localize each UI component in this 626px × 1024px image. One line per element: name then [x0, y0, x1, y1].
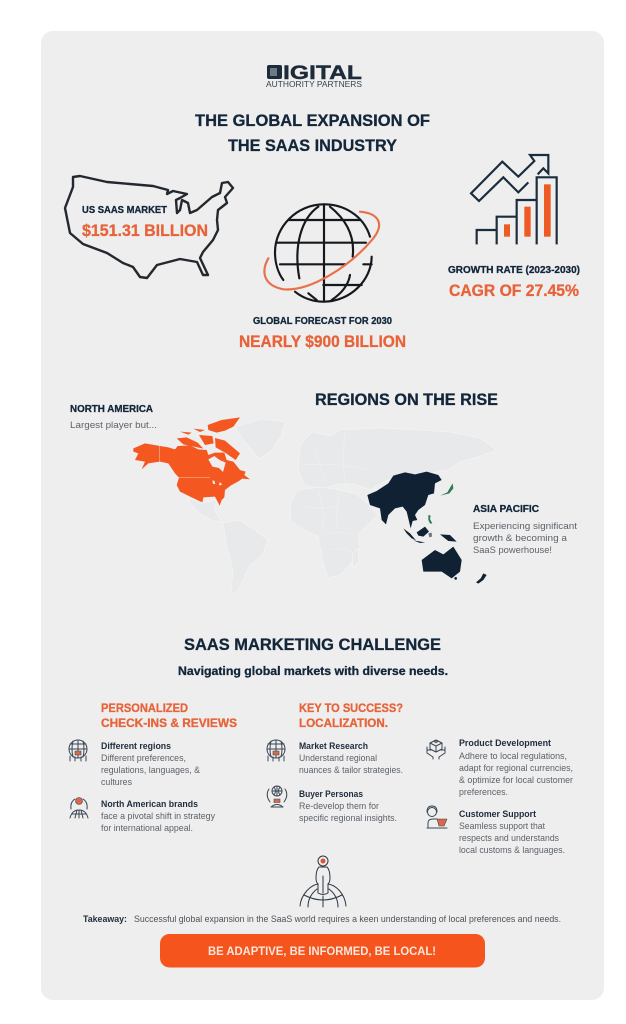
label: Asia Pacific: [473, 504, 577, 556]
heading: regions on the rise: REGIONS ON THE RISE: [315, 390, 498, 409]
column heading: KEY TO SUCCESS?: [299, 701, 403, 715]
text: North American brands: [101, 799, 215, 834]
text: buyer personas: Buyer Personas: [299, 789, 363, 800]
stat: growth rate: [448, 155, 580, 300]
text: market research: Understand regional: [299, 753, 377, 764]
icon: person on globe: [300, 856, 346, 907]
logo: [266, 62, 362, 89]
heading: SaaS marketing challenge: [178, 635, 448, 678]
text: buyer personas: specific regional insights.: [299, 813, 397, 824]
column: key to success: [267, 701, 403, 824]
text: product development: & optimize for local customer: [459, 775, 573, 786]
icon: buyer personas: [267, 786, 287, 807]
text: buyer personas: [299, 789, 397, 824]
text: customer support: [459, 809, 565, 856]
text: product development: Adhere to local regulations,: [459, 751, 567, 762]
title: [195, 111, 430, 155]
stat: global forecast: [239, 204, 406, 351]
US-Canada border line: [179, 476, 210, 478]
logo: AUTHORITY PARTNERS: [266, 80, 362, 89]
icon: globe with orbit: [264, 204, 379, 302]
text: different regions: cultures: [101, 777, 132, 788]
column heading: [299, 701, 403, 730]
text: customer support: local customs & languages.: [459, 845, 565, 856]
column heading: LOCALIZATION.: [299, 716, 388, 730]
call-to-action button: BE ADAPTIVE, BE INFORMED, BE LOCAL!: [208, 946, 436, 958]
label: growth rate: GROWTH RATE (2023-2030): [448, 265, 580, 276]
stat: US SaaS market: [65, 176, 233, 278]
text: buyer personas: Re-develop them for: [299, 801, 379, 812]
logo: IGITAL: [283, 62, 362, 84]
icon: growth bars and arrow: [471, 155, 557, 244]
column: product and support: [427, 738, 573, 856]
text: product development: [459, 738, 573, 798]
value: growth rate: CAGR OF 27.45%: [449, 282, 579, 300]
map: North America highlighted: [133, 417, 250, 506]
text: different regions: Different regions: [101, 741, 171, 752]
takeaway text: Successful global expansion in the SaaS world requires a keen understanding of local preferences and needs.: [134, 914, 561, 924]
column: personalized check-ins: [69, 701, 237, 834]
icon: product development: [427, 740, 445, 759]
text: customer support: Seamless support that: [459, 821, 545, 832]
map: rest of world: [187, 419, 497, 594]
takeaway text: Takeaway:: [83, 914, 127, 924]
map: Asia Pacific highlighted: [367, 472, 487, 584]
title: THE GLOBAL EXPANSION OF: [195, 111, 430, 130]
text: different regions: Different preferences,: [101, 753, 186, 764]
text: North American brands: face a pivotal shift in strategy: [101, 811, 215, 822]
text: customer support: Customer Support: [459, 809, 537, 820]
value: US SaaS market: $151.31 BILLION: [82, 222, 208, 240]
icon: regional globe: [69, 740, 87, 761]
text: North American brands: North American brands: [101, 799, 198, 810]
label: US SaaS market: US SAAS MARKET: [82, 205, 167, 216]
heading: SaaS marketing challenge: SAAS MARKETING CHALLENGE: [184, 635, 441, 654]
text: different regions: [101, 741, 201, 788]
text: different regions: regulations, languages, &: [101, 765, 201, 776]
world map: [70, 404, 577, 594]
column heading: PERSONALIZED: [101, 701, 188, 715]
label: North America: [70, 404, 157, 431]
text: North American brands: for international appeal.: [101, 823, 193, 834]
label: North America: NORTH AMERICA: [70, 404, 153, 415]
value: global forecast: NEARLY $900 BILLION: [239, 333, 406, 351]
label: Asia Pacific: Experiencing significant: [473, 521, 577, 532]
icon: customer support: [427, 806, 447, 828]
column heading: CHECK-INS & REVIEWS: [101, 716, 237, 730]
label: North America: Largest player but...: [70, 420, 157, 431]
text: market research: [299, 741, 403, 776]
call-to-action button: [160, 934, 485, 968]
title: THE SAAS INDUSTRY: [228, 136, 398, 155]
text: product development: Product Development: [459, 738, 552, 749]
icon: market research globe: [267, 740, 285, 761]
label: Asia Pacific: growth & becoming a: [473, 533, 568, 544]
icon: North American brands: [70, 798, 88, 818]
column heading: [101, 701, 237, 730]
label: global forecast: GLOBAL FORECAST FOR 2030: [253, 316, 392, 327]
text: customer support: respects and understands: [459, 833, 559, 844]
text: product development: adapt for regional currencies,: [459, 763, 573, 774]
subheading: Navigating global markets with diverse needs.: [178, 664, 448, 678]
label: Asia Pacific: ASIA PACIFIC: [473, 504, 539, 515]
icon: US outline: [65, 176, 233, 278]
text: market research: Market Research: [299, 741, 368, 752]
text: product development: preferences.: [459, 787, 508, 798]
text: market research: nuances & tailor strategies.: [299, 765, 403, 776]
label: Asia Pacific: SaaS powerhouse!: [473, 545, 552, 556]
